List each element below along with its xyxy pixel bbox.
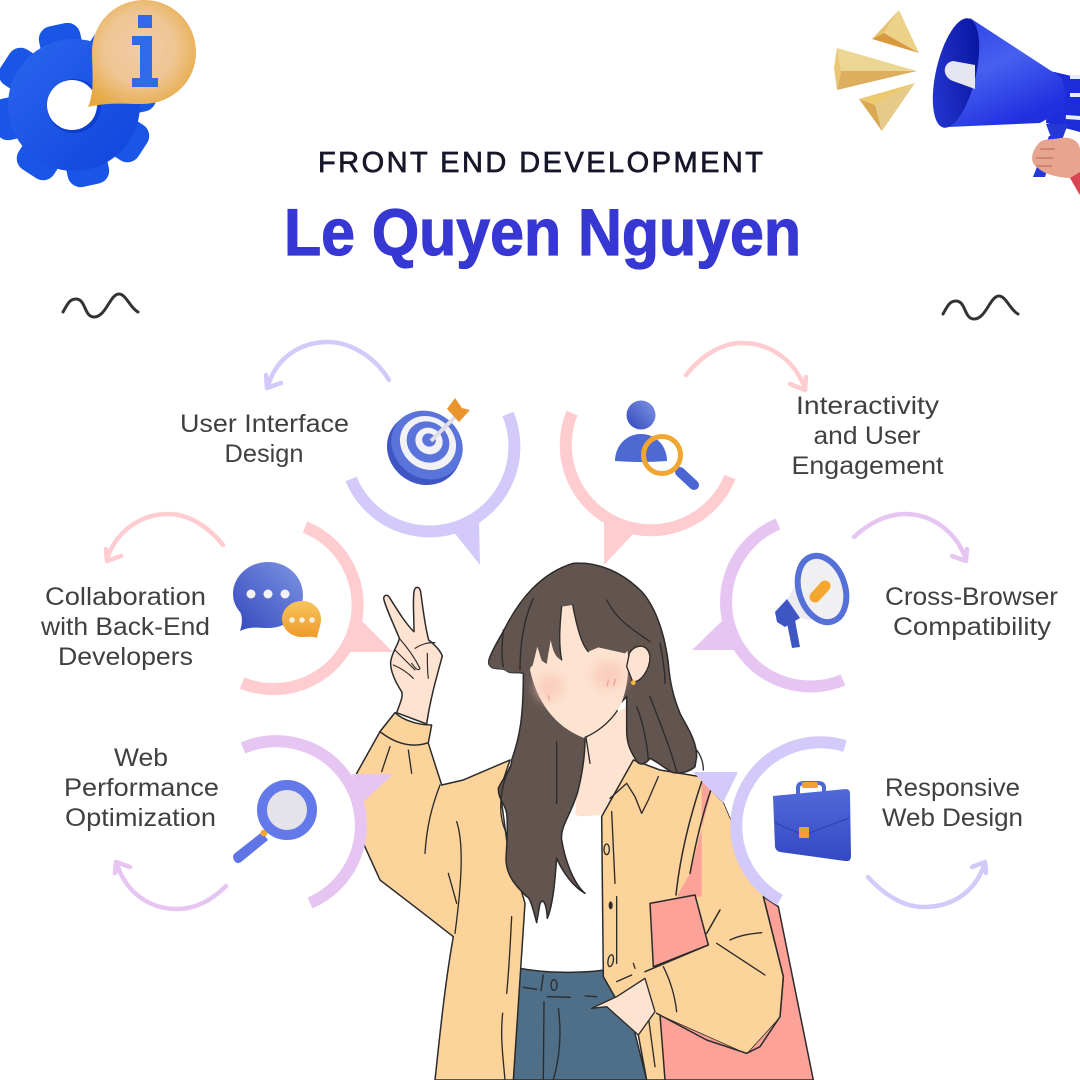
raised hand xyxy=(384,587,442,724)
hand in pocket xyxy=(592,978,655,1035)
white t-shirt xyxy=(522,813,608,970)
label: user interface design xyxy=(180,410,349,468)
jaw line xyxy=(585,711,617,763)
jacket folds and buttons xyxy=(382,747,658,1080)
gold shards xyxy=(834,10,919,131)
icon: magnifying glass xyxy=(233,785,312,863)
icon: megaphone xyxy=(775,550,854,648)
jeans xyxy=(513,968,647,1080)
right sleeve xyxy=(645,791,783,1053)
label: user interface design: Design xyxy=(224,440,304,468)
neck xyxy=(575,707,635,817)
hair back xyxy=(489,563,697,923)
arrow: user interface design xyxy=(266,342,389,388)
hair outline and strands xyxy=(489,563,703,830)
ear xyxy=(627,646,650,682)
icon: megaphone held by hand with gold shards xyxy=(834,10,1080,195)
jacket right half xyxy=(602,760,783,1080)
hand xyxy=(1032,138,1080,195)
ring: cross-browser compatibility xyxy=(692,524,843,686)
bag strap xyxy=(677,782,712,897)
sleeve cuff xyxy=(380,713,432,745)
ring: responsive web design xyxy=(693,742,845,900)
arrow: collaboration xyxy=(106,514,223,561)
label: user interface design: User Interface xyxy=(180,410,349,438)
label: collaboration with back-end developers xyxy=(40,583,210,671)
label: responsive web design: Responsive xyxy=(885,774,1020,802)
illustration: girl with peace sign xyxy=(357,563,813,1080)
bag back xyxy=(660,897,813,1080)
icon: person with magnifier xyxy=(615,400,694,485)
subtitle: Front End Development: FRONT END DEVELOPMENT xyxy=(318,147,763,179)
blush xyxy=(592,661,624,689)
title: Le Quyen Nguyen: Le Quyen Nguyen xyxy=(284,195,801,269)
blush xyxy=(537,673,563,700)
label: interactivity and user engagement: Interactivity xyxy=(796,392,940,420)
label: cross-browser compatibility: Cross-Browser xyxy=(885,583,1058,611)
arrow: interactivity xyxy=(686,343,806,390)
cheek marks xyxy=(548,679,615,700)
ring: web performance optimization xyxy=(243,741,393,903)
arrow: responsive xyxy=(868,862,986,907)
label: web performance optimization: Optimization xyxy=(65,804,216,832)
info speech bubble xyxy=(88,0,196,107)
ring: interactivity and user engagement xyxy=(566,413,730,565)
megaphone xyxy=(924,14,1080,177)
icon: briefcase xyxy=(773,782,851,861)
label: collaboration with back-end developers: Collaboration xyxy=(45,583,206,611)
label: responsive web design: Web Design xyxy=(882,804,1023,832)
arrow: web performance xyxy=(115,862,226,909)
ring: user interface design xyxy=(351,414,514,565)
bangs xyxy=(489,563,665,673)
icon: gear with info bubble xyxy=(0,0,196,190)
icon: target with arrow xyxy=(373,397,476,499)
bag front panel xyxy=(650,895,708,967)
label: web performance optimization: Web xyxy=(114,744,168,772)
arrow: cross-browser xyxy=(854,514,967,561)
label: cross-browser compatibility xyxy=(885,583,1058,641)
jacket left half xyxy=(357,713,525,1080)
face xyxy=(530,600,628,738)
earring xyxy=(631,680,636,685)
jeans details xyxy=(523,975,597,1080)
decoration: right squiggle xyxy=(943,296,1018,319)
label: web performance optimization: Performance xyxy=(64,774,219,802)
ring: collaboration with back-end developers xyxy=(242,527,393,689)
label: interactivity and user engagement: and User xyxy=(814,422,920,450)
label: interactivity and user engagement: Engagement xyxy=(792,452,944,480)
label: web performance optimization xyxy=(64,744,219,832)
label: collaboration with back-end developers: Developers xyxy=(58,643,193,671)
gear xyxy=(0,20,159,190)
label: collaboration with back-end developers: with Back-End xyxy=(40,613,210,641)
icon: chat bubbles xyxy=(233,562,321,638)
label: interactivity and user engagement xyxy=(792,392,944,480)
label: responsive web design xyxy=(882,774,1023,832)
decoration: left squiggle xyxy=(63,294,138,317)
label: cross-browser compatibility: Compatibility xyxy=(893,613,1052,641)
